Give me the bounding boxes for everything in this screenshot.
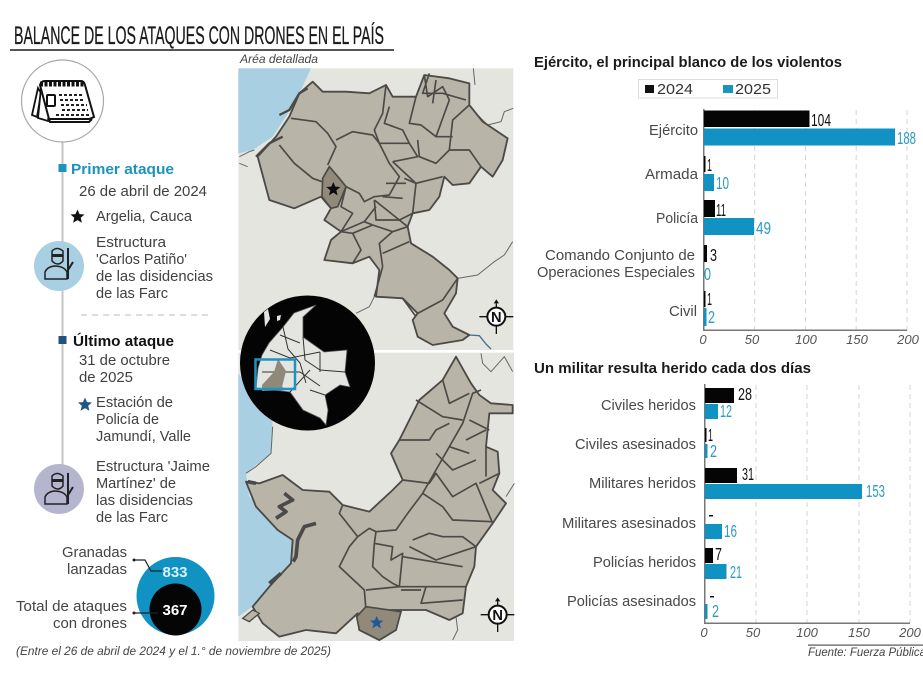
axis labels: 0: [700, 625, 708, 640]
first attack marker: [58, 164, 66, 172]
last attack location: Estación de: [96, 395, 173, 411]
region: Cauca department: [258, 75, 508, 345]
neighbouring rivers: [239, 68, 513, 313]
last attack structure: [96, 459, 210, 526]
last attack structure: las disidencias: [96, 493, 193, 509]
axis labels: [699, 332, 920, 347]
bars Policías heridos: 7: [715, 544, 722, 564]
panel: nested circles totals: lanzadas: [67, 562, 127, 578]
last attack date: de 2025: [79, 370, 133, 386]
bars Civil: [669, 289, 715, 327]
bars Comando Conjunto: Operaciones Especiales: [537, 265, 695, 281]
legend: [638, 80, 778, 98]
municipal boundaries: [339, 380, 499, 610]
bars Civiles asesinados: Civiles asesinados: [575, 437, 696, 453]
last attack marker: [58, 336, 66, 344]
first attack location: Argelia, Cauca: [96, 209, 193, 225]
bars Civiles heridos: [601, 384, 752, 421]
bars Comando Conjunto: Comando Conjunto de: [545, 248, 695, 264]
water: [238, 373, 293, 617]
panel: nested circles totals: 833: [162, 564, 188, 581]
bars Policías heridos: [593, 544, 742, 582]
bars Ejército: Ejército: [649, 123, 698, 139]
bars Militares heridos: [589, 464, 885, 501]
bars Armada: [645, 155, 729, 193]
bars Civiles asesinados: 1: [708, 425, 713, 445]
axis labels: 50: [746, 625, 761, 640]
bars Militares heridos: 31: [742, 464, 754, 484]
first attack heading: Primer ataque: [71, 161, 174, 178]
region: Valle department: [246, 357, 513, 640]
last attack structure: de las Farc: [96, 510, 168, 526]
first attack structure: de las Farc: [96, 286, 168, 302]
icon: armed person blue: [34, 241, 84, 291]
axis labels: 100: [795, 332, 818, 347]
bars Militares asesinados: [562, 515, 737, 541]
bars Policías heridos: 21: [730, 562, 742, 582]
bars Policías asesinados: [567, 594, 719, 621]
bars Civil: Civil: [669, 304, 697, 320]
title: BALANCE DE LOS ATAQUES CON DRONES EN EL PAÍS: [14, 21, 384, 50]
icon: blue star map: [370, 616, 383, 628]
bars Armada: 10: [716, 173, 729, 193]
panel: timeline: [22, 60, 213, 526]
icon: compass north: [479, 299, 513, 334]
first attack structure: Estructura: [96, 235, 167, 251]
last attack date: [79, 353, 170, 386]
bar chart: targets: [537, 109, 920, 347]
bars Ejército: [649, 110, 916, 148]
axis labels: 150: [848, 625, 871, 640]
bars Militares heridos: Militares heridos: [589, 476, 696, 492]
bars Policías asesinados: Policías asesinados: [567, 594, 696, 610]
bars Civiles heridos: Civiles heridos: [601, 398, 696, 414]
last attack date: 31 de octubre: [79, 353, 170, 369]
dark coast: [256, 88, 308, 157]
icon: compass north: N: [492, 608, 503, 624]
water: [238, 68, 311, 153]
bars Policía: Policía: [656, 211, 699, 227]
bars Policías heridos: Policías heridos: [593, 555, 696, 571]
icon: blue star: [78, 398, 92, 411]
bars Militares asesinados: Militares asesinados: [562, 516, 696, 532]
bars Comando Conjunto: 3: [710, 245, 717, 265]
icon: armed person purple: [34, 464, 84, 514]
icon: compass north: N: [491, 310, 502, 326]
chart heading 2: Un militar resulta herido cada dos días: [534, 361, 811, 377]
bars Policía: 11: [716, 200, 726, 220]
first attack structure: 'Carlos Patiño': [96, 252, 187, 268]
bar chart: casualties: [562, 384, 922, 640]
axis labels: 100: [796, 625, 819, 640]
bars Policía: 49: [756, 218, 771, 238]
bars Comando Conjunto: 0: [704, 264, 711, 284]
region: Argelia highlighted: [322, 167, 346, 208]
bars Militares heridos: 153: [866, 481, 885, 501]
bars Civil: 1: [707, 289, 712, 309]
region: Jamundí highlighted: [357, 607, 401, 640]
coastal islands: [248, 482, 316, 583]
panel: nested circles totals: Total de ataques: [16, 599, 127, 615]
bars Ejército: 104: [811, 110, 831, 130]
first attack structure: de las disidencias: [96, 269, 213, 285]
icon: black star: [70, 210, 84, 223]
axis labels: 0: [699, 332, 707, 347]
legend: 2025: [735, 81, 771, 98]
axis labels: 200: [896, 332, 920, 347]
bars Civil: 2: [708, 307, 715, 327]
bars Civiles asesinados: [575, 425, 717, 461]
bars Armada: 1: [707, 155, 712, 175]
last attack location: [96, 395, 191, 445]
bars Militares asesinados: 16: [724, 521, 737, 541]
bars Civiles heridos: 12: [720, 401, 732, 421]
panel: nested circles totals: [16, 545, 214, 636]
legend: 2024: [657, 81, 693, 98]
last attack location: Jamundí, Valle: [96, 429, 191, 445]
last attack structure: Martínez' de: [96, 476, 176, 492]
last attack heading: Último ataque: [73, 332, 174, 350]
panel: nested circles totals: con drones: [53, 616, 127, 632]
first attack date: 26 de abril de 2024: [79, 184, 207, 200]
bars Comando Conjunto: [537, 245, 717, 284]
panel: bottom map Valle: [238, 353, 514, 641]
last attack structure: Estructura 'Jaime: [96, 459, 210, 475]
locator rectangle: [256, 360, 295, 389]
footnote: (Entre el 26 de abril de 2024 y el 1.° de noviembre de 2025): [16, 646, 331, 658]
bars Civiles asesinados: 2: [710, 441, 717, 461]
axis labels: 50: [745, 332, 760, 347]
bars Policías asesinados: 2: [712, 601, 719, 621]
inset: Colombia locator: [240, 296, 375, 430]
panel: nested circles totals: Granadas: [62, 545, 127, 561]
chart heading 1: Ejército, el principal blanco de los violentos: [534, 55, 842, 71]
axis labels: [700, 625, 922, 640]
municipal boundaries: [279, 73, 481, 317]
panel: nested circles totals: 367: [162, 602, 188, 619]
bars Policía: [656, 200, 771, 238]
axis labels: 200: [898, 625, 922, 640]
Colombia shape: [256, 305, 350, 425]
icon: black star map: [326, 182, 340, 195]
panel: top map Cauca: [238, 68, 513, 350]
first attack structure: [96, 235, 213, 302]
icon: calendar: [22, 60, 104, 142]
last attack location: Policía de: [96, 412, 159, 428]
map label: Aréa detallada: [239, 54, 318, 66]
axis labels: 150: [846, 332, 869, 347]
bars Armada: Armada: [645, 167, 699, 183]
neighbouring rivers: [246, 353, 514, 640]
bars Civiles heridos: 28: [738, 384, 752, 404]
icon: compass north: [481, 597, 514, 632]
